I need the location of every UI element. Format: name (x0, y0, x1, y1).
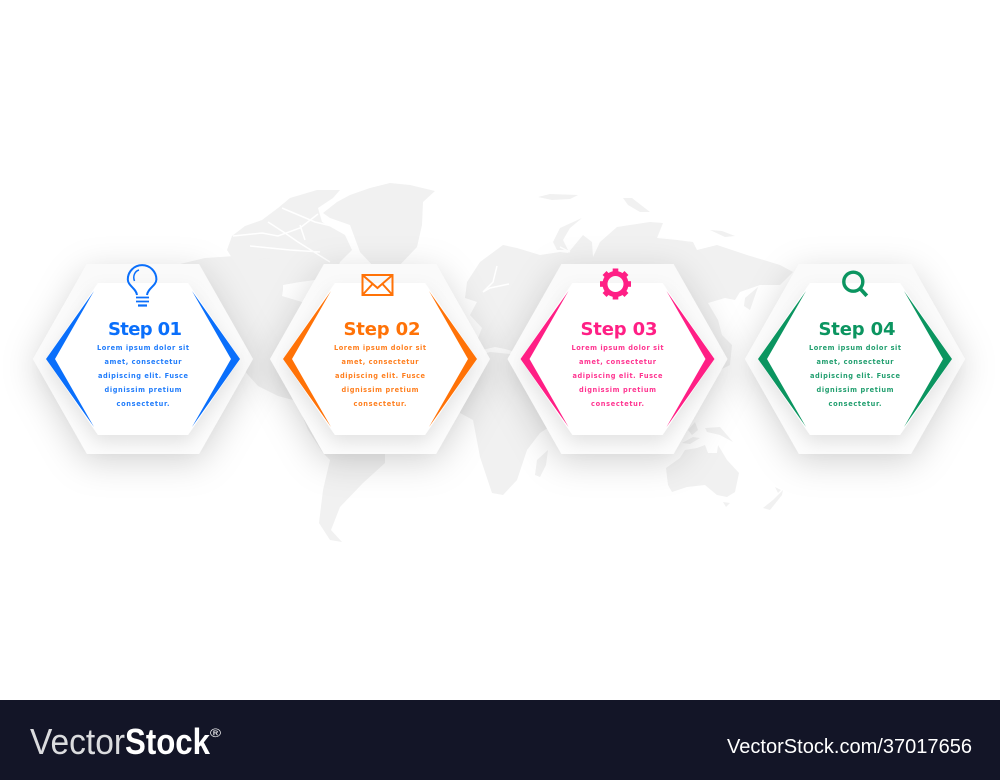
description (334, 344, 426, 408)
map: Japan (744, 287, 758, 310)
map: Madagascar (535, 450, 548, 477)
description: adipiscing elit. Fusce (810, 372, 901, 380)
description: consectetur. (116, 400, 170, 408)
panel: step 01 (33, 264, 253, 454)
map: South America (300, 400, 385, 542)
world map (170, 183, 793, 542)
map: New Zealand (763, 487, 783, 510)
right chevron (904, 291, 952, 427)
description: adipiscing elit. Fusce (572, 372, 663, 380)
right chevron (429, 291, 477, 427)
icon: light bulb (128, 265, 156, 306)
heading: Step 01 (108, 319, 182, 340)
map: sea channels (233, 208, 570, 292)
description: amet, consectetur (342, 358, 419, 366)
map: Canadian arctic (227, 190, 352, 268)
inner hexagon (758, 283, 952, 435)
inner hexagon (46, 283, 240, 435)
map: Greenland (323, 183, 435, 268)
outer hexagon (745, 264, 965, 454)
left chevron (758, 291, 806, 427)
description: amet, consectetur (579, 358, 657, 366)
footer image id: VectorStock.com/37017656 (727, 736, 972, 758)
inner hexagon (283, 283, 477, 435)
left chevron (46, 291, 94, 427)
right chevron (192, 291, 240, 427)
description: dignissim pretium (579, 386, 656, 394)
footer logo (30, 721, 221, 762)
right chevron (666, 291, 714, 427)
description: Lorem ipsum dolor sit (809, 344, 901, 352)
footer logo: ® (210, 726, 221, 740)
icon: magnifier (844, 272, 867, 296)
map: Svalbard and arctic islands (538, 194, 735, 237)
description: adipiscing elit. Fusce (335, 372, 426, 380)
description: Lorem ipsum dolor sit (97, 344, 189, 352)
map: New Guinea and Indonesia (682, 422, 733, 444)
description: Lorem ipsum dolor sit (572, 344, 664, 352)
left chevron (520, 291, 568, 427)
footer logo: Vector (30, 721, 125, 762)
footer logo: Stock (125, 721, 211, 762)
outer hexagon (33, 264, 253, 454)
description (572, 344, 664, 408)
description (809, 344, 901, 408)
map: Eurasia (465, 222, 793, 390)
panel: step 02 (270, 264, 490, 454)
description: amet, consectetur (816, 358, 894, 366)
description: adipiscing elit. Fusce (98, 372, 189, 380)
inner hexagon (520, 283, 714, 435)
description: dignissim pretium (816, 386, 894, 394)
heading: Step 02 (344, 319, 420, 340)
description: consectetur. (354, 400, 406, 408)
description: amet, consectetur (104, 358, 182, 366)
outer hexagon (508, 264, 728, 454)
outer hexagon (270, 264, 490, 454)
icon: envelope (362, 275, 392, 295)
map: Tasmania (723, 502, 730, 507)
panel: step 03 (508, 264, 728, 454)
left chevron (283, 291, 331, 427)
footer bar (0, 700, 1000, 780)
description: consectetur. (591, 400, 644, 408)
map: Novaya Zemlya (553, 218, 582, 250)
description: consectetur. (828, 400, 882, 408)
icon: gear (600, 268, 631, 300)
panel: step 04 (745, 264, 965, 454)
description: dignissim pretium (104, 386, 182, 394)
map: North America (170, 256, 340, 400)
heading: Step 04 (818, 319, 896, 340)
map: Australia (666, 445, 739, 497)
description (97, 344, 189, 408)
description: Lorem ipsum dolor sit (334, 344, 426, 352)
map: Africa (455, 352, 570, 495)
heading: Step 03 (580, 319, 658, 340)
description: dignissim pretium (342, 386, 419, 394)
